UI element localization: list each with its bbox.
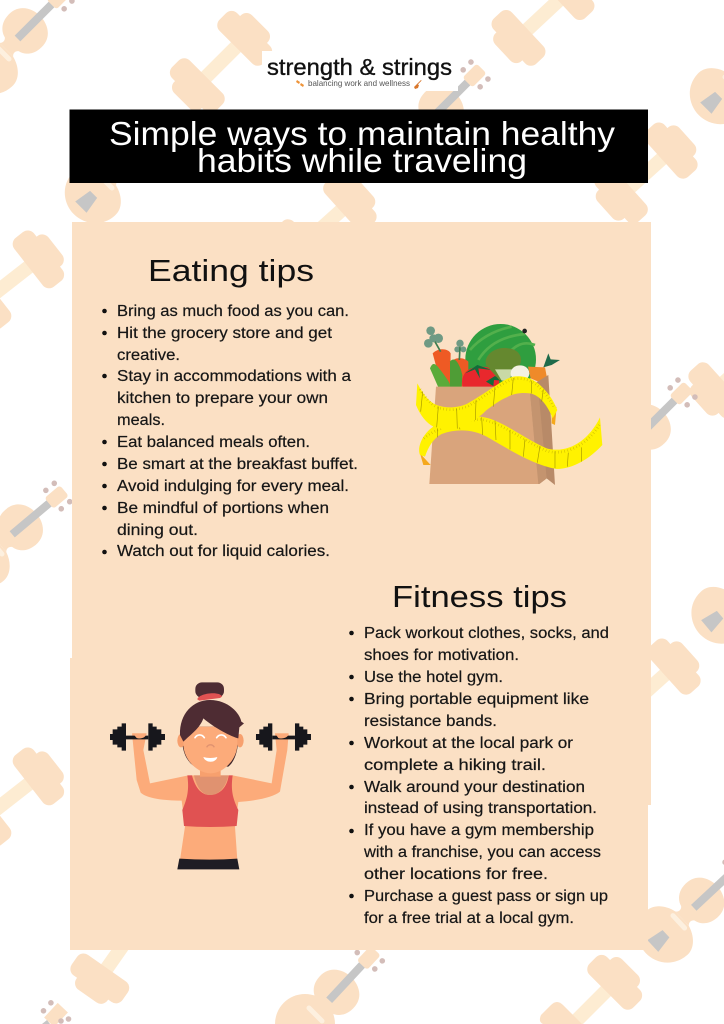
list: fitness tips: If you have a gym membership (364, 822, 594, 839)
title banner (70, 110, 648, 183)
list: eating tips: Be smart at the breakfast buffet. (117, 456, 358, 473)
hair front (180, 700, 244, 742)
tape end (420, 407, 557, 465)
panel: background (70, 222, 651, 950)
bag (429, 387, 539, 484)
list: fitness tips: complete a hiking trail. (364, 757, 546, 774)
logo tagline: balancing work and wellness (308, 78, 410, 88)
list: fitness tips: shoes for motivation. (364, 647, 519, 664)
hair bun (195, 682, 224, 698)
list: fitness tips: Use the hotel gym. (364, 669, 503, 686)
carrots (433, 349, 451, 387)
list: fitness tips: Bring portable equipment like (364, 691, 589, 708)
shorts (177, 859, 239, 869)
title line 1: Simple ways to maintain healthy (109, 115, 616, 152)
hair tie (197, 693, 222, 701)
list: eating tips: creative. (117, 347, 180, 364)
sports top (182, 775, 238, 827)
logo (267, 54, 452, 89)
peas (430, 364, 450, 387)
face (183, 727, 237, 773)
ears (177, 734, 185, 747)
eyes and mouth (195, 735, 226, 738)
list: eating tips: Bring as much food as you can. (117, 303, 349, 320)
heading: eating tips: Eating tips (148, 253, 314, 288)
watermelon (465, 324, 536, 395)
list: eating tips: dining out. (117, 522, 198, 539)
list: fitness tips: Workout at the local park or (364, 735, 573, 752)
illustration: woman lifting dumbbells (110, 682, 311, 869)
list: fitness tips: other locations for free. (364, 866, 548, 883)
onion (511, 365, 529, 381)
list: eating tips: Hit the grocery store and get (117, 325, 333, 342)
broccoli (486, 348, 521, 380)
icon: small dumbbell (296, 80, 304, 87)
tape lower strip (419, 417, 602, 469)
list: eating tips (102, 303, 358, 560)
list: eating tips: Avoid indulging for every meal. (117, 478, 349, 495)
list: eating tips: Watch out for liquid calories. (117, 543, 330, 560)
arms and torso (132, 733, 289, 860)
orange vegetable (528, 367, 547, 384)
heading: fitness tips: Fitness tips (392, 579, 567, 614)
list: fitness tips: instead of using transportation. (364, 800, 597, 817)
title line 2: habits while traveling (197, 142, 527, 179)
icon: small violin (414, 80, 422, 89)
list: fitness tips: Pack workout clothes, socks, and (364, 625, 609, 642)
list: eating tips: Eat balanced meals often. (117, 434, 310, 451)
list: fitness tips: Purchase a guest pass or sign up (364, 888, 608, 905)
tape upper strip (416, 376, 557, 429)
list: fitness tips: with a franchise, you can access (363, 844, 601, 861)
list: eating tips: Stay in accommodations with a (117, 368, 351, 385)
tomato (462, 367, 499, 387)
list: eating tips: kitchen to prepare your own (117, 390, 328, 407)
list: fitness tips: for a free trial at a local gym. (364, 910, 574, 927)
neck (200, 765, 221, 777)
list: fitness tips: resistance bands. (364, 713, 497, 730)
illustration: grocery bag with measuring tape (416, 324, 602, 485)
logo wordmark: strength & strings (267, 54, 452, 80)
list: fitness tips: Walk around your destination (364, 779, 585, 796)
dumbbell left (110, 723, 165, 751)
dumbbell right (256, 723, 311, 751)
list: eating tips: meals. (117, 412, 165, 429)
neck shade (194, 775, 228, 795)
list: fitness tips (349, 625, 609, 927)
hair back (182, 727, 238, 767)
list: eating tips: Be mindful of portions when (117, 500, 329, 517)
